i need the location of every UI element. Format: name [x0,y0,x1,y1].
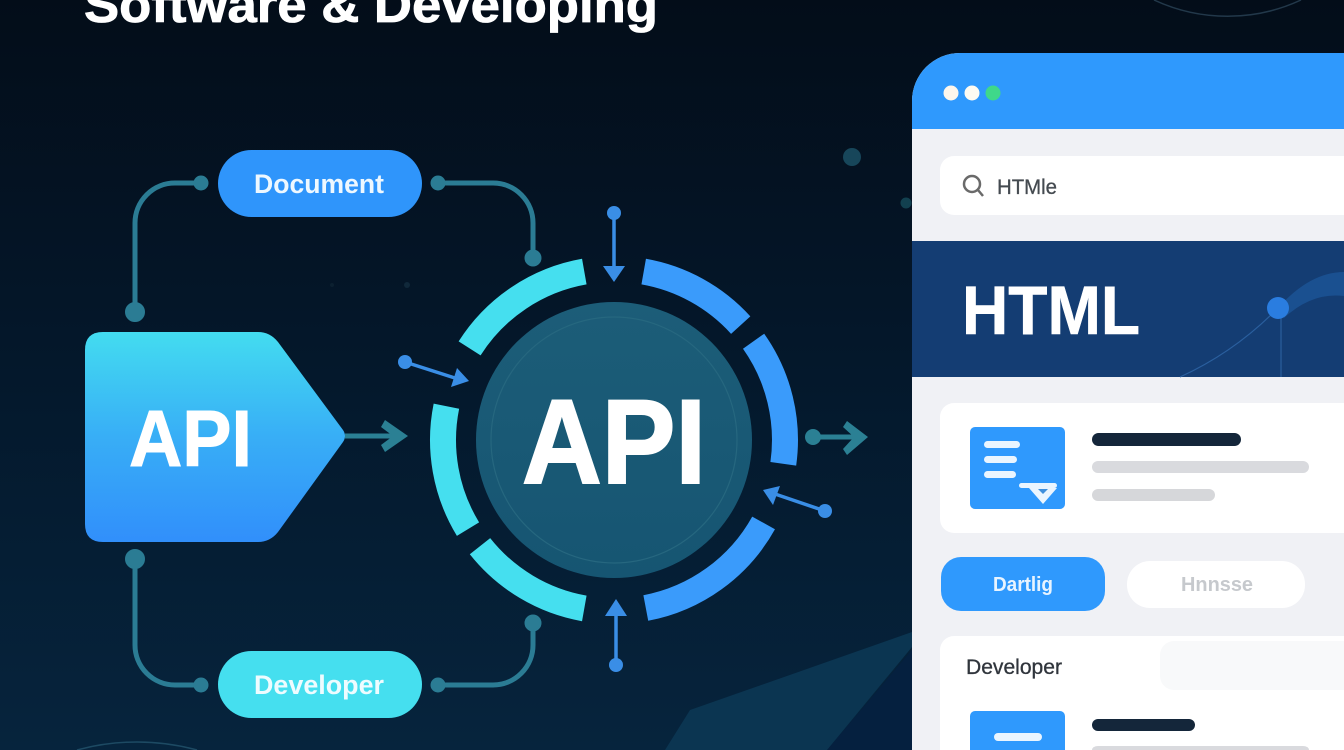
icon: document [970,427,1065,509]
connector: left API to developer [126,550,208,692]
arrow: top into hub [603,206,625,282]
hub core [476,302,752,578]
arrow: upper left into hub [398,355,469,387]
content card 1 [940,403,1344,533]
button: active [941,557,1105,611]
left API block [85,332,345,542]
arrow: lower right into hub [763,486,832,518]
button: inactive [1127,561,1305,608]
connector: document to left API [126,176,208,321]
button: inactive: Hnnsse [1181,574,1253,596]
hub ring segments [443,272,785,608]
arrow: bottom into hub [605,599,627,672]
arrow: left API to hub [345,420,408,452]
icon: search [964,176,983,196]
pill: Document [218,150,422,217]
browser title bar [912,53,1344,129]
connector: developer to ring [432,616,540,692]
button: active: Dartlig [993,574,1053,596]
panel: browser window [912,53,1344,750]
left API block: API [129,394,252,483]
HTML banner [912,241,1344,377]
HTML banner: HTML [962,272,1140,349]
hub label: API [522,375,706,509]
pill: Document: Document [254,169,384,199]
pill: Developer: Developer [254,670,384,700]
search bar: HTMle [997,176,1057,199]
arrow: hub out to browser [805,421,868,455]
content card 2 [940,636,1344,750]
pill: Developer [218,651,422,718]
central API hub [443,272,785,608]
search bar [940,156,1344,215]
icon: document 2 [970,711,1065,750]
connector: document to ring [432,176,540,266]
content card 2: Developer [966,656,1062,679]
